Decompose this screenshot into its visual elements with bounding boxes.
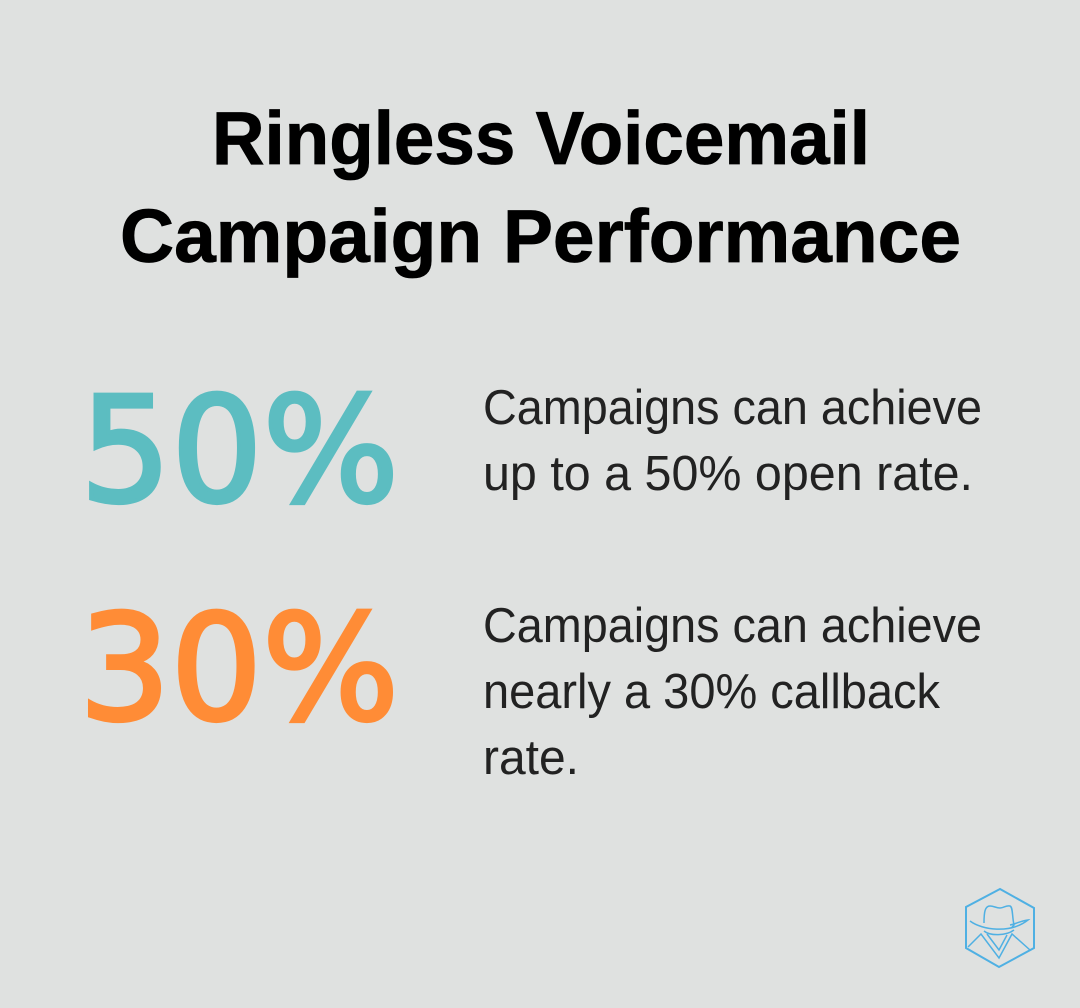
description: open rate: up to a 50% open rate.: [483, 447, 973, 501]
description: callback rate: Campaigns can achieve: [483, 599, 982, 653]
description: open rate: [483, 381, 982, 501]
icon: logo hexagon with hat figure: [966, 889, 1034, 967]
title: Ringless Voicemail: [212, 96, 870, 180]
stat: 30%: 30%: [79, 584, 399, 754]
description: callback rate: [483, 599, 982, 785]
title: Campaign Performance: [120, 194, 961, 278]
description: open rate: Campaigns can achieve: [483, 381, 982, 435]
stat: 50%: 50%: [80, 366, 399, 536]
title: [120, 96, 961, 278]
description: callback rate: rate.: [483, 731, 579, 785]
description: callback rate: nearly a 30% callback: [483, 665, 940, 719]
